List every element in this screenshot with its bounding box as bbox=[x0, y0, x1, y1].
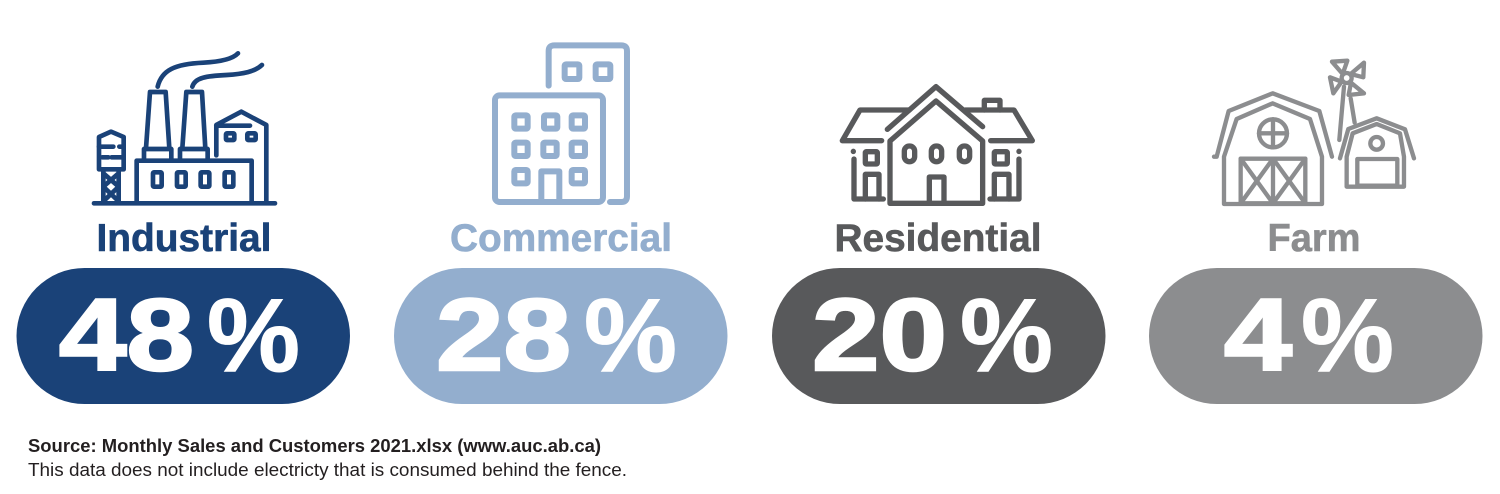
panel: industrial bbox=[16, 53, 350, 404]
pill: 28%: % bbox=[584, 278, 677, 394]
icon: barn and windmill bbox=[1214, 61, 1414, 204]
pill: 28% bbox=[394, 268, 728, 404]
panel: residential bbox=[772, 87, 1106, 404]
pill: 20%: 20 bbox=[812, 278, 947, 392]
pill: 48% bbox=[16, 268, 350, 404]
disclaimer line: This data does not include electricty that is consumed behind the fence. bbox=[28, 460, 627, 480]
pill: 4%: 4 bbox=[1224, 278, 1292, 392]
pill: 48%: % bbox=[207, 278, 300, 394]
pill: 4%: % bbox=[1301, 278, 1394, 394]
icon: office buildings bbox=[495, 45, 627, 202]
heading: Residential: Residential bbox=[834, 217, 1042, 260]
heading: Farm: Farm bbox=[1268, 217, 1360, 260]
heading: Commercial: Commercial bbox=[450, 217, 672, 260]
icon: factory bbox=[94, 53, 275, 203]
source note bbox=[28, 436, 627, 480]
icon: house bbox=[842, 87, 1032, 203]
pill: 20%: % bbox=[960, 278, 1053, 394]
source line: Source: Monthly Sales and Customers 2021.xlsx (www.auc.ab.ca) bbox=[28, 436, 601, 456]
pill: 48%: 48 bbox=[59, 278, 194, 392]
pill: 20% bbox=[772, 268, 1106, 404]
panel: commercial bbox=[394, 45, 728, 404]
panel: farm bbox=[1149, 61, 1482, 404]
pill: 4% bbox=[1149, 268, 1482, 404]
pill: 28%: 28 bbox=[436, 278, 571, 392]
heading: Industrial: Industrial bbox=[96, 217, 272, 260]
